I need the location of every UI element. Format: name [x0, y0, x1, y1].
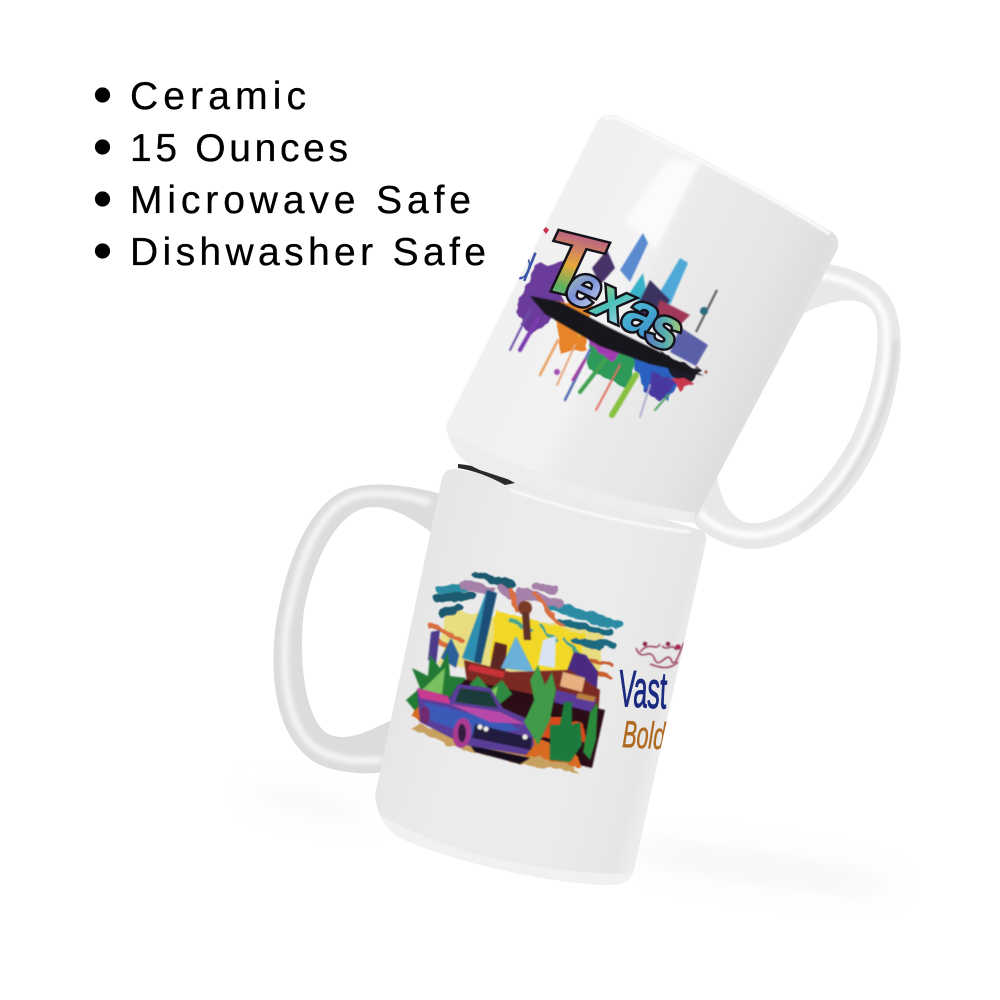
partial slogan letter d: [518, 227, 549, 282]
black ground under lettering: [530, 296, 704, 376]
item: Dishwasher Safe: Dishwasher Safe: [130, 231, 486, 274]
letter x: x: [583, 263, 644, 338]
letter s: s: [637, 293, 693, 365]
Texas artwork: [510, 212, 717, 417]
paint splashes: [515, 262, 702, 402]
letter a: a: [614, 279, 670, 351]
letter T: T: [533, 212, 613, 319]
lower mug body: [375, 469, 706, 885]
flourish: [636, 642, 684, 668]
Texas lettering: [533, 212, 693, 365]
partial slogan letter d: d: [509, 241, 541, 291]
sunset sky: [440, 610, 605, 680]
rim highlight: [605, 118, 830, 234]
letter e: e: [557, 251, 613, 323]
cacti: [524, 665, 556, 745]
upper mug: [446, 114, 901, 549]
upper mug handle: [685, 262, 901, 549]
feature list: [95, 75, 486, 274]
drips: [510, 310, 668, 417]
upper mug base lip: [449, 432, 696, 523]
inner rim shadow: [458, 464, 515, 485]
item: Ceramic: Ceramic: [130, 75, 306, 118]
lower mug: [273, 464, 736, 885]
contact highlight: [510, 490, 690, 532]
skyline towers: [462, 590, 497, 664]
lower mug handle: [273, 485, 445, 773]
gloss highlight: [625, 160, 700, 250]
lower mug artwork: [406, 574, 618, 772]
lower mug base lip: [380, 815, 632, 885]
floor shadows: [250, 783, 896, 901]
ground: [410, 705, 582, 768]
car: [470, 745, 530, 764]
Bold slogan: Bold Hearts: [622, 712, 735, 761]
clouds: [430, 574, 618, 678]
item: 15 Ounces: 15 Ounces: [130, 127, 348, 170]
city base: [464, 660, 600, 715]
agave: [406, 652, 466, 712]
Vast slogan: Vast Skies: [617, 659, 736, 724]
slogan text on lower mug: [620, 640, 684, 750]
upper mug body: [446, 114, 838, 523]
skyline: [620, 233, 648, 282]
item: Microwave Safe: Microwave Safe: [130, 179, 471, 222]
